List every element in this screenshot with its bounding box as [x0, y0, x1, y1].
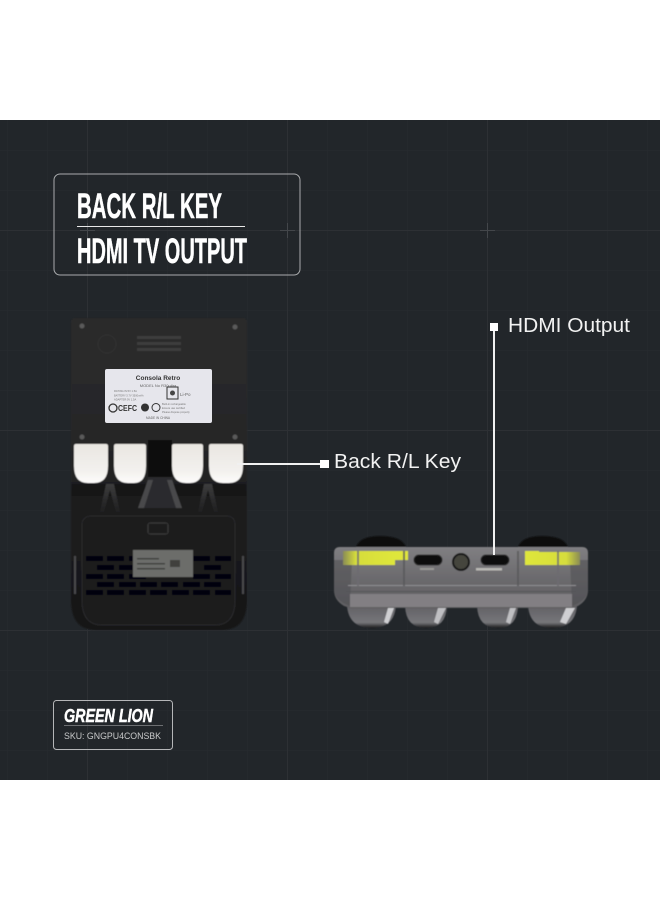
battery cover [82, 516, 235, 625]
brand box [54, 700, 172, 750]
title box [54, 174, 300, 275]
shoulder sticks [356, 536, 406, 547]
vents [86, 556, 231, 595]
product label: Please dispose properly [162, 410, 190, 414]
product label: BATTERY:3.7V 3500mAh [114, 394, 144, 398]
connector: back r/l key [237, 460, 329, 468]
title: hdmi tv output: HDMI TV OUTPUT [77, 232, 247, 271]
label: hdmi output: HDMI Output [508, 315, 630, 337]
back keys [74, 444, 243, 483]
product label: CEFC [118, 404, 137, 413]
product label: RATING IN:5V 1.5A [114, 389, 137, 393]
handheld console back view [71, 318, 247, 630]
title: back r/l key: BACK R/L KEY [77, 187, 222, 226]
audio jack [453, 554, 469, 570]
key wells and ribs [148, 440, 172, 480]
product label: MADE IN CHINA [146, 416, 171, 420]
connector: hdmi output [490, 323, 498, 555]
product label: MODEL No R30ultra [140, 383, 177, 388]
usb-c ports [414, 555, 442, 565]
handheld console top view [334, 536, 588, 628]
sku: SKU: GNGPU4CONSBK [64, 731, 162, 742]
brand logo: GREEN LION [64, 706, 154, 726]
product label: Built-in rechargeable [162, 402, 186, 406]
yellow insert [343, 551, 580, 565]
product label: Consola Retro [136, 375, 180, 382]
transparent shell [334, 547, 588, 608]
rating sticker [133, 550, 193, 577]
product label: ADAPTER:5V 1.5A [114, 398, 136, 402]
product label: Li-Po [180, 392, 191, 397]
label: back r/l key: Back R/L Key [334, 451, 461, 473]
side notches [74, 556, 244, 594]
dark background panel [0, 120, 660, 780]
product label [105, 369, 212, 423]
rear buttons [347, 606, 577, 628]
product label: Ensure use certified [162, 406, 185, 410]
